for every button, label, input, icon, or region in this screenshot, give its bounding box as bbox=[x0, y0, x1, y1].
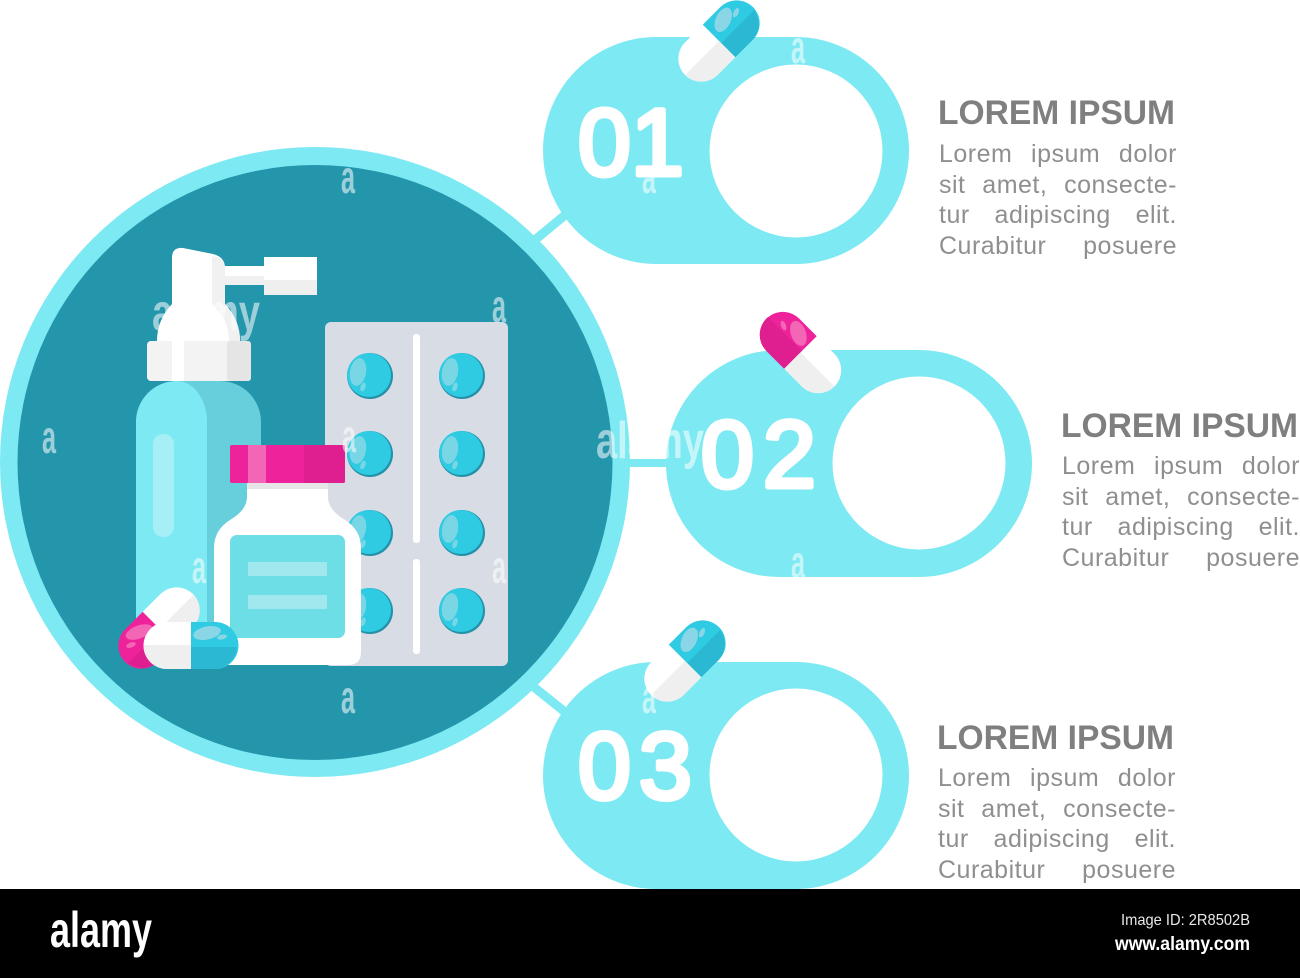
body text 01 bbox=[939, 140, 1177, 260]
body text 01: tur adipiscing elit. bbox=[939, 201, 1177, 229]
step 02 badge bbox=[666, 350, 1032, 577]
main circle panel bbox=[0, 147, 630, 777]
watermarks: a bbox=[341, 671, 355, 723]
body text 02 bbox=[1062, 452, 1300, 572]
icon: capsules pile bbox=[109, 578, 239, 678]
body text 02: tur adipiscing elit. bbox=[1062, 513, 1300, 541]
footer bar bbox=[0, 889, 1300, 978]
body text 02: Curabitur posuere bbox=[1062, 544, 1300, 572]
icon: blue capsule 01 bbox=[668, 0, 769, 91]
connector: main circle to step 03 bbox=[530, 684, 570, 716]
watermarks: a bbox=[791, 536, 805, 588]
watermarks: a bbox=[492, 541, 506, 593]
body text 03: Curabitur posuere bbox=[938, 856, 1176, 884]
heading 02: LOREM IPSUM bbox=[1061, 407, 1298, 445]
body text 03: Lorem ipsum dolor bbox=[938, 764, 1176, 792]
watermarks: a bbox=[192, 541, 206, 593]
watermarks: a bbox=[642, 151, 656, 203]
watermarks: a bbox=[492, 280, 506, 332]
footer logo: alamy bbox=[50, 902, 152, 958]
watermarks: a bbox=[642, 671, 656, 723]
step 01 badge bbox=[543, 37, 909, 264]
heading 01: LOREM IPSUM bbox=[938, 94, 1175, 132]
heading 03: LOREM IPSUM bbox=[937, 719, 1174, 757]
footer url: www.alamy.com bbox=[1114, 934, 1250, 955]
connector: main circle to step 01 bbox=[530, 211, 570, 244]
watermarks: alamy bbox=[596, 412, 704, 470]
step 01 number: 01 bbox=[578, 90, 684, 196]
icon: blue capsule 03 bbox=[634, 610, 735, 711]
icon: medicine jar bbox=[214, 445, 361, 665]
watermarks: a bbox=[791, 21, 805, 73]
body text 03: tur adipiscing elit. bbox=[938, 825, 1176, 853]
watermarks bbox=[42, 21, 805, 723]
step 02 number: 02 bbox=[701, 402, 816, 508]
step 03 badge bbox=[543, 662, 909, 889]
body text 02: Lorem ipsum dolor bbox=[1062, 452, 1300, 480]
icon: pink capsule 02 bbox=[750, 301, 852, 403]
body text 01: sit amet, consecte- bbox=[939, 170, 1177, 198]
watermarks: alamy bbox=[152, 284, 260, 342]
watermarks: a bbox=[342, 410, 356, 462]
body text 02: sit amet, consecte- bbox=[1062, 482, 1300, 510]
watermarks: a bbox=[341, 151, 355, 203]
body text 01: Curabitur posuere bbox=[939, 232, 1177, 260]
body text 03: sit amet, consecte- bbox=[938, 794, 1176, 822]
icon: blister pack of tablets bbox=[325, 322, 508, 666]
icon: nasal spray bottle bbox=[136, 248, 317, 650]
watermarks: a bbox=[42, 411, 56, 463]
body text 01: Lorem ipsum dolor bbox=[939, 140, 1177, 168]
step 03 number: 03 bbox=[578, 714, 692, 820]
body text 03 bbox=[938, 764, 1176, 884]
footer image id: Image ID: 2R8502B bbox=[1121, 912, 1250, 929]
connector: main circle to step 02 bbox=[626, 459, 676, 467]
